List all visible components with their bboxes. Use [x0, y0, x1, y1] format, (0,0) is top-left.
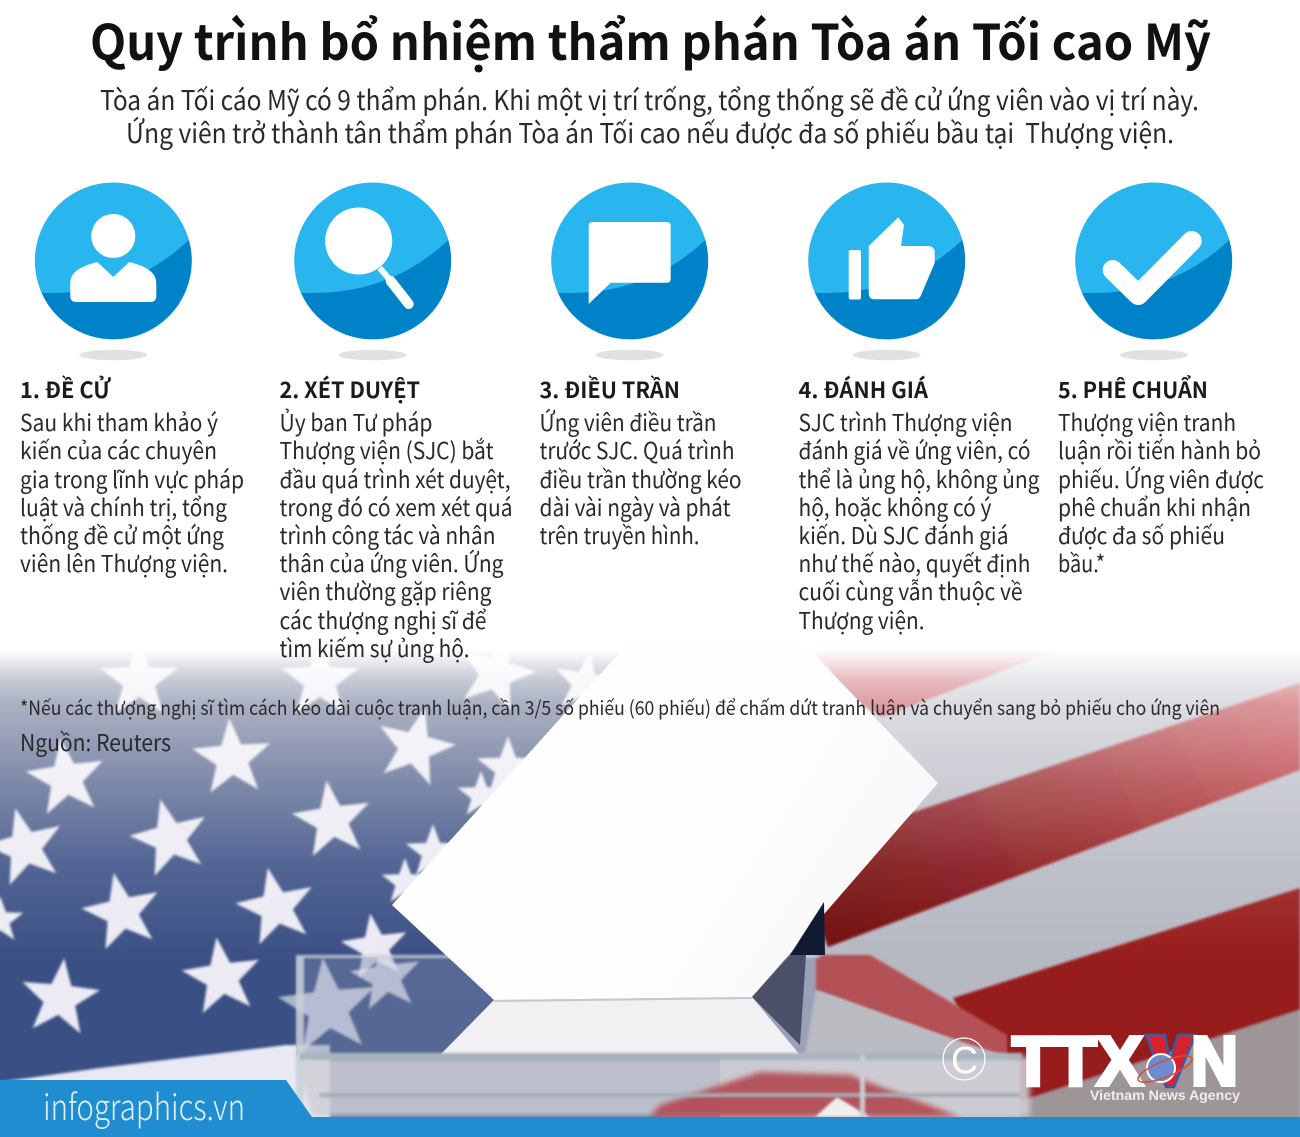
- step 1: luật và chính trị, tổng: [20, 489, 227, 523]
- step 3: trước SJC. Quá trình: [540, 432, 734, 466]
- subtitle: Ứng viên trở thành tân thẩm phán Tòa án Tối cao nếu được đa số phiếu bầu tại Thượng viện.: [126, 112, 1174, 151]
- step 5: [1058, 373, 1264, 579]
- step 2: [280, 373, 512, 664]
- logo: TTXVN: [943, 1022, 1240, 1103]
- step 2: tìm kiếm sự ủng hộ.: [280, 630, 470, 664]
- title: Quy trình bổ nhiệm thẩm phán Tòa án Tối cao Mỹ: [90, 4, 1211, 75]
- step 4: 4. ĐÁNH GIÁ: [798, 373, 929, 405]
- step 5: bầu.*: [1058, 545, 1105, 579]
- step 2: trình công tác và nhân: [280, 517, 496, 551]
- step 4: đánh giá về ứng viên, có: [798, 432, 1030, 466]
- step 2: thân của ứng viên. Ứng: [280, 545, 504, 579]
- step 2: đầu quá trình xét duyệt,: [280, 461, 510, 495]
- step 4: kiến. Dù SJC đánh giá: [798, 517, 1008, 551]
- step 4: như thế nào, quyết định: [798, 545, 1030, 579]
- source: Nguồn: Reuters: [20, 724, 171, 758]
- text: site label: infographics.vn: [43, 1079, 245, 1131]
- icon: person: [35, 182, 192, 360]
- subtitle: [100, 79, 1199, 151]
- step 2: các thượng nghị sĩ để: [280, 602, 487, 636]
- background photo: flag and ballot box: [0, 624, 1300, 1120]
- step 4: cuối cùng vẫn thuộc về: [798, 573, 1022, 607]
- step 4: SJC trình Thượng viện: [798, 404, 1012, 438]
- icon: speech bubble: [551, 182, 708, 360]
- step 1: [20, 373, 244, 579]
- step 1: gia trong lĩnh vực pháp: [20, 461, 244, 495]
- step 4: [798, 373, 1040, 636]
- icon: thumbs up: [808, 182, 965, 360]
- bottom bar: [0, 1080, 1300, 1137]
- step 1: thống đề cử một ứng: [20, 517, 224, 551]
- logo: TTXVN: C: [951, 1040, 978, 1082]
- step 1: viên lên Thượng viện.: [20, 545, 228, 579]
- step 4: Thượng viện.: [798, 602, 924, 636]
- logo: TTXVN: Vietnam News Agency: [1090, 1087, 1240, 1103]
- icon: magnifier: [294, 182, 451, 360]
- subtitle: Tòa án Tối cáo Mỹ có 9 thẩm phán. Khi một vị trí trống, tổng thống sẽ đề cử ứng viên vào vị trí này.: [100, 79, 1199, 118]
- step 4: thể là ủng hộ, không ủng: [798, 461, 1040, 495]
- step 1: Sau khi tham khảo ý: [20, 404, 218, 438]
- step 1: 1. ĐỀ CỬ: [20, 373, 112, 405]
- step 3: dài vài ngày và phát: [540, 489, 731, 523]
- step 2: 2. XÉT DUYỆT: [280, 373, 420, 405]
- step 3: 3. ĐIỀU TRẦN: [540, 373, 680, 405]
- step 2: trong đó có xem xét quá: [280, 489, 512, 523]
- step 5: Thượng viện tranh: [1058, 404, 1236, 438]
- step 3: trên truyền hình.: [540, 517, 700, 551]
- step 5: phiếu. Ứng viên được: [1058, 461, 1264, 495]
- step 2: Ủy ban Tư pháp: [280, 404, 432, 438]
- step 2: viên thường gặp riêng: [280, 573, 492, 607]
- step 3: Ứng viên điều trần: [540, 404, 716, 438]
- step 5: 5. PHÊ CHUẨN: [1058, 373, 1208, 405]
- step 5: luận rồi tiến hành bỏ: [1058, 432, 1261, 466]
- step 5: phê chuẩn khi nhận: [1058, 489, 1251, 523]
- step 5: được đa số phiếu: [1058, 517, 1225, 551]
- logo: TTXVN: N: [1191, 1022, 1238, 1100]
- icon: check mark: [1075, 182, 1232, 360]
- ballot box glass: [274, 936, 1030, 1117]
- logo: TTXVN: TTX: [1012, 1022, 1143, 1100]
- step 3: [540, 373, 742, 551]
- step 2: Thượng viện (SJC) bắt: [280, 432, 494, 466]
- step 3: điều trần thường kéo: [540, 461, 742, 495]
- step 4: hộ, hoặc không có ý: [798, 489, 992, 523]
- ballot paper: [392, 640, 938, 1045]
- step 1: kiến của các chuyên: [20, 432, 217, 466]
